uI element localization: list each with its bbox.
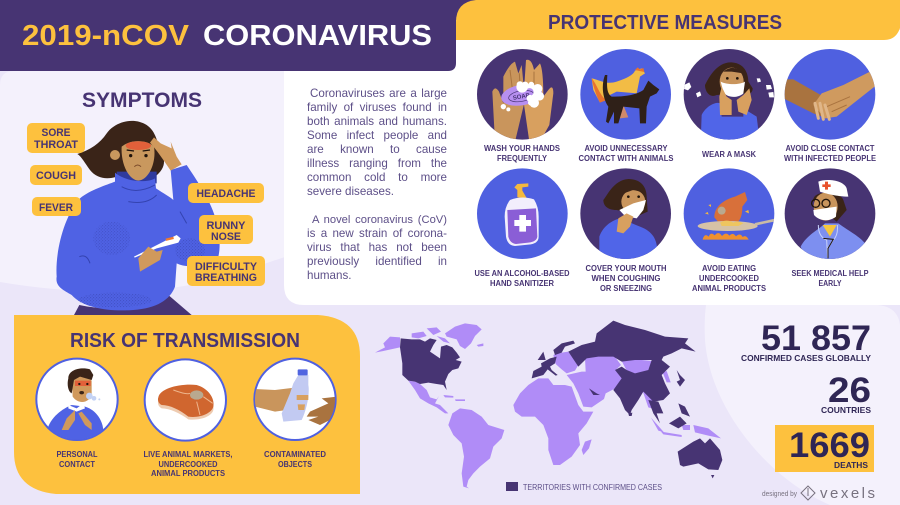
panel: description and protective measures	[284, 30, 900, 305]
caption: cover mouth	[586, 264, 667, 293]
label: cough: COUGH	[36, 170, 76, 182]
stat: confirmed cases: 51 857	[761, 319, 871, 358]
caption: live animal markets: ANIMAL PRODUCTS	[151, 469, 226, 478]
panel: protective measures banner	[456, 0, 900, 40]
stat: deaths: DEATHS	[834, 460, 868, 470]
text block: coronaviruses description: illness ranging from the	[307, 157, 447, 170]
credit: designed by vexels: designed by	[762, 489, 797, 498]
caption: seek medical help: SEEK MEDICAL HELP	[792, 269, 869, 278]
text block: novel coronavirus description: is a new strain of corona-	[307, 227, 447, 240]
text block: novel coronavirus description	[307, 214, 447, 282]
icon: sanitizer	[477, 168, 568, 259]
caption: avoid close contact: WITH INFECTED PEOPLE	[784, 154, 877, 163]
caption: wash hands	[484, 144, 561, 163]
stat: countries: 26	[828, 371, 871, 410]
caption: avoid close contact: AVOID CLOSE CONTACT	[786, 144, 875, 153]
label: fever	[32, 197, 81, 216]
title: 2019-nCOV	[22, 20, 190, 52]
label: difficulty breathing: BREATHING	[195, 272, 257, 284]
caption: wash hands: WASH YOUR HANDS	[484, 144, 561, 153]
heading: symptoms: SYMPTOMS	[82, 89, 202, 112]
text block: novel coronavirus description: previously identified in	[307, 255, 447, 268]
label: cough	[30, 165, 82, 185]
text block: coronaviruses description: are known to cause	[307, 143, 447, 156]
caption: personal contact	[56, 450, 98, 469]
caption: live animal markets	[144, 450, 232, 478]
caption: cover mouth: OR SNEEZING	[600, 284, 652, 293]
text block: coronaviruses description: severe diseases.	[307, 185, 394, 198]
icon: raw meat	[145, 359, 226, 441]
panel: symptoms background	[0, 71, 285, 292]
panel: risk of transmission	[14, 315, 360, 494]
heading: risk of transmission: RISK OF TRANSMISSION	[70, 330, 300, 352]
credit: designed by vexels: vexels	[820, 485, 875, 502]
caption: cover mouth: WHEN COUGHING	[592, 274, 660, 283]
caption: seek medical help: EARLY	[818, 279, 842, 288]
icon: contaminated bottle	[254, 359, 337, 440]
icon: wash hands	[477, 49, 568, 142]
caption: wear a mask: WEAR A MASK	[702, 150, 756, 159]
panel: statistics background	[705, 305, 900, 505]
label: sore throat	[27, 123, 85, 153]
text block: coronaviruses description: common cold to more	[307, 171, 447, 184]
text block: coronaviruses description: Some infect people and	[307, 129, 447, 142]
caption: sanitizer: HAND SANITIZER	[490, 279, 554, 288]
caption: avoid animals: AVOID UNNECESSARY	[584, 144, 668, 153]
label: runny nose: NOSE	[211, 231, 241, 243]
stat: deaths: 1669	[789, 426, 870, 465]
credit: designed by vexels	[762, 485, 875, 502]
caption: contaminated objects	[264, 450, 326, 469]
caption: wash hands: FREQUENTLY	[497, 154, 548, 163]
text block: novel coronavirus description: virus that has not been	[307, 241, 447, 254]
caption: personal contact: CONTACT	[59, 460, 95, 469]
icon: personal contact	[36, 359, 118, 442]
icon: wear a mask	[684, 49, 774, 142]
label: difficulty breathing: DIFFICULTY	[195, 261, 258, 273]
caption: live animal markets: UNDERCOOKED	[158, 460, 218, 469]
caption: sanitizer: USE AN ALCOHOL-BASED	[474, 269, 570, 278]
label: headache: HEADACHE	[196, 188, 256, 200]
stat: deaths	[775, 425, 874, 472]
caption: sanitizer	[474, 269, 570, 288]
label: fever: FEVER	[39, 202, 73, 214]
icon: wash hands: SOAP	[513, 93, 530, 102]
caption: avoid undercooked: UNDERCOOKED	[699, 274, 759, 283]
label: sore throat: SORE	[42, 127, 70, 139]
text block: coronaviruses description	[307, 87, 447, 198]
caption: avoid animals	[578, 144, 674, 163]
world map	[375, 321, 722, 488]
panel: title banner	[0, 0, 480, 71]
label: sore throat: THROAT	[34, 139, 78, 151]
illustration: woman with fever	[56, 121, 220, 315]
caption: live animal markets: LIVE ANIMAL MARKETS,	[144, 450, 232, 459]
heading: protective measures: PROTECTIVE MEASURES	[548, 12, 782, 34]
stat: countries	[821, 371, 871, 415]
icon: cover mouth	[580, 168, 671, 260]
label: headache	[188, 183, 264, 203]
text block: novel coronavirus description: humans.	[307, 269, 351, 282]
icon: cooking meat	[684, 168, 775, 259]
caption: contaminated objects: CONTAMINATED	[264, 450, 326, 459]
text block: coronaviruses description: family of viruses found in	[307, 101, 447, 114]
icon: handshake	[783, 49, 877, 140]
title	[22, 20, 432, 52]
icon: doctor	[785, 168, 875, 260]
text block: novel coronavirus description: A novel coronavirus (CoV)	[312, 214, 447, 226]
title: CORONAVIRUS	[203, 20, 432, 52]
text block: coronaviruses description: both animals and humans.	[307, 115, 447, 128]
caption: avoid undercooked	[692, 264, 767, 293]
caption: avoid close contact	[784, 144, 877, 163]
text block: coronaviruses description: Coronaviruses are a large	[310, 87, 447, 100]
icon: avoid animals	[580, 49, 671, 140]
map legend: TERRITORIES WITH CONFIRMED CASES	[523, 483, 662, 492]
caption: contaminated objects: OBJECTS	[278, 460, 313, 469]
caption: cover mouth: COVER YOUR MOUTH	[586, 264, 667, 273]
caption: seek medical help	[792, 269, 869, 288]
label: runny nose	[199, 215, 253, 244]
stat: confirmed cases: CONFIRMED CASES GLOBALLY	[741, 353, 871, 363]
label: runny nose: RUNNY	[206, 220, 246, 232]
caption: avoid undercooked: AVOID EATING	[702, 264, 756, 273]
caption: avoid animals: CONTACT WITH ANIMALS	[578, 154, 674, 163]
caption: avoid undercooked: ANIMAL PRODUCTS	[692, 284, 767, 293]
stat: countries: COUNTRIES	[821, 405, 871, 415]
caption: personal contact: PERSONAL	[56, 450, 98, 459]
label: difficulty breathing	[187, 256, 265, 286]
